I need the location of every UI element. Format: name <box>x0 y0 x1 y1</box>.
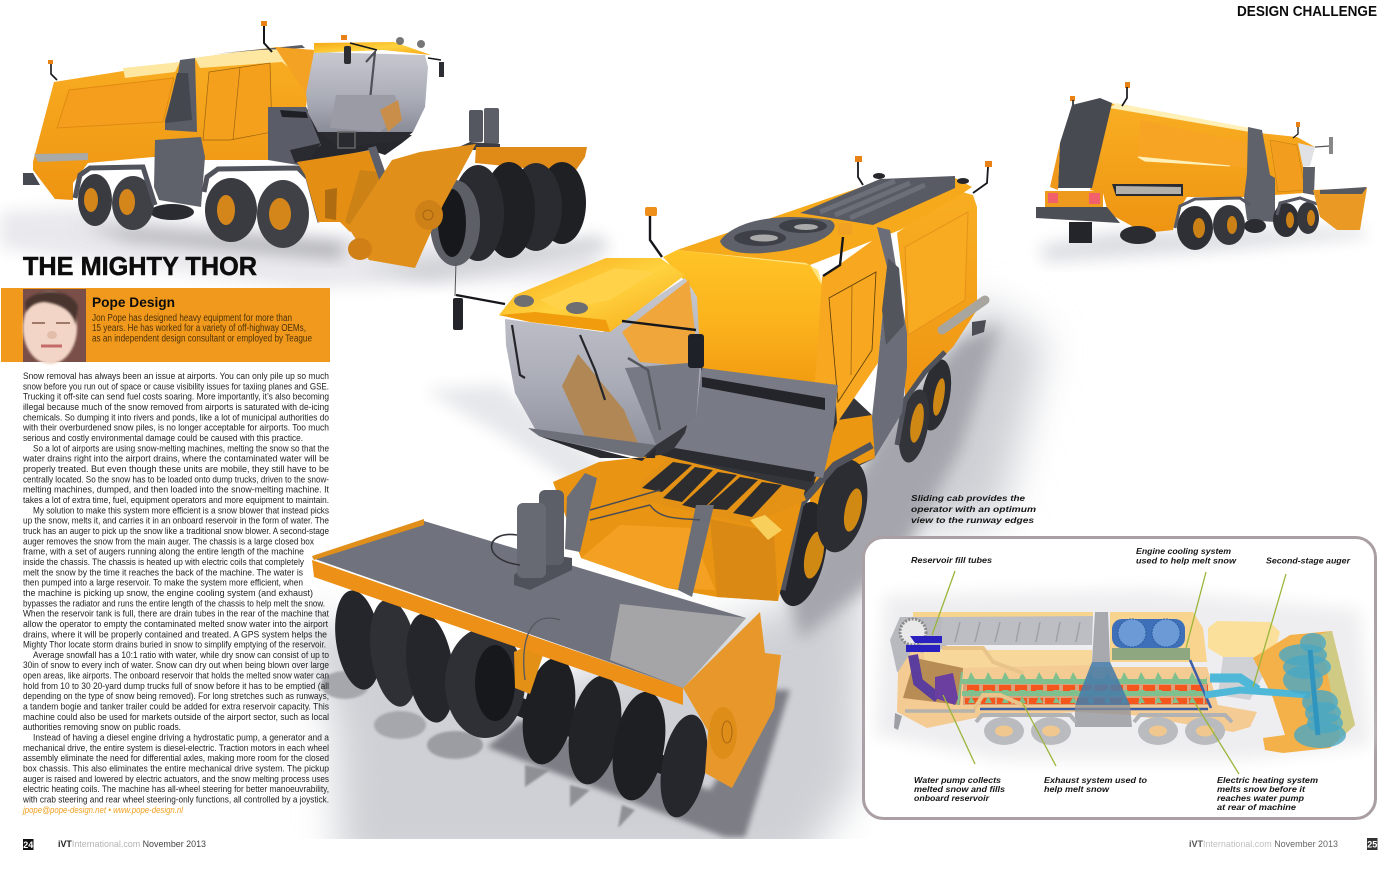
cab roof <box>314 42 431 55</box>
article body text: frame, with a set of augers running along the entire length of the machine <box>23 547 304 558</box>
author bio: as an independent design consultant or employed by Teague <box>92 334 312 344</box>
grey pillar <box>872 227 907 457</box>
panel frame <box>864 538 1376 818</box>
article body text: allow the operator to empty the contaminated melted snow water into the airport <box>23 619 328 630</box>
author banner <box>1 288 330 364</box>
cab roof <box>499 258 685 332</box>
chassis deck <box>553 455 805 601</box>
auger discs <box>329 587 715 821</box>
dark backing under cab <box>268 107 412 165</box>
article body text: then pumped into a large reservoir. To make the system more efficient, when <box>23 578 303 589</box>
author photo <box>23 289 86 364</box>
article body text: centrally located. So the snow has to be loaded onto dump trucks, driven to the snow- <box>23 474 329 485</box>
rear wheel arch <box>897 352 945 445</box>
lower side sill <box>795 415 875 560</box>
blower plate <box>348 144 476 268</box>
cab caption: Sliding cab provides the <box>911 493 1025 503</box>
label: water pump: melted snow and fills <box>914 784 1005 794</box>
author contact links: jpope@pope-design.net • www.pope-design.nl <box>21 805 184 816</box>
label: electric heating: Electric heating system <box>1217 775 1319 785</box>
article body text: Mighty Thor locate storm drains buried in snow to simplify emptying of the reservoir. <box>23 640 326 651</box>
front module and cooling <box>1110 612 1207 662</box>
exhaust <box>1112 184 1183 196</box>
section title: DESIGN CHALLENGE <box>1237 3 1377 20</box>
leader lines <box>932 571 1286 774</box>
label: engine cooling: used to help melt snow <box>1136 556 1237 566</box>
wheels <box>976 715 1232 745</box>
base rail <box>980 708 1208 710</box>
auger discs <box>538 162 586 244</box>
article body text: depending on the type of snow being removed). For long stretches such as runways, <box>23 691 329 702</box>
article body text: When the reservoir tank is full, there are drain tubes in the rear of the machine that <box>23 609 329 620</box>
cab glass <box>306 52 428 132</box>
label: water pump <box>914 775 1005 803</box>
grey pillar and cab <box>1244 127 1275 222</box>
article body text: up the snow, melts it, and carries it in an onboard reservoir in the form of water. The <box>23 516 329 527</box>
article body text: snow before you run out of space or cause visibility issues for taxiing planes and GSE. <box>23 381 329 392</box>
article body text: Trucking it off-site can send fuel costs soaring. More importantly, it’s also becoming <box>23 392 329 403</box>
blower end plate <box>683 612 781 788</box>
water pump and fill tubes <box>906 636 958 705</box>
author bio <box>92 313 312 344</box>
article body text: takes a lot of extra time, fuel, equipment operators and more equipment to maintain. <box>23 495 329 506</box>
article body text: inside the chassis. The chassis is heated up with electric coils that completely <box>23 557 304 568</box>
label: exhaust system <box>1044 775 1147 794</box>
label: engine cooling: Engine cooling system <box>1136 546 1232 556</box>
label: second-stage auger: Second-stage auger <box>1266 556 1351 566</box>
article body text: with crab steering and rear wheel steering-only functions, all controlled by a joystick. <box>22 795 329 806</box>
article body text: hold from 10 to 30 20-yard dump trucks full of snow before it has to be emptied (all <box>23 681 329 692</box>
cab caption: operator with an optimum <box>911 504 1037 514</box>
article body text: melting machines, dumped, and then loaded into the snow-melting machine. It <box>23 485 329 496</box>
truck render: top right rear view <box>1036 82 1367 250</box>
label: electric heating <box>1217 775 1319 812</box>
author name: Pope Design <box>92 294 175 310</box>
article body text: assembly eliminate the need for differential axles, making more room for the closed <box>23 753 329 764</box>
article body text: So a lot of airports are using snow-melting machines, melting the snow so that the <box>33 443 329 454</box>
centre pillar <box>1075 612 1132 727</box>
screw augers <box>962 672 1207 685</box>
exhaust pipes <box>942 648 1023 673</box>
cab glass <box>505 278 701 458</box>
article body text: open areas, like airports. The onboard reservoir that holds the melted snow water can <box>23 671 329 682</box>
blower <box>1313 188 1367 230</box>
label: electric heating: at rear of machine <box>1217 802 1296 812</box>
roof <box>677 178 972 265</box>
lights, mirrors, beacons <box>453 156 992 368</box>
rear grey panel <box>1058 98 1112 188</box>
cab <box>1208 621 1280 657</box>
article body text: Snow removal has always been an issue at airports. You can only pile up so much <box>23 371 329 382</box>
wheels <box>1120 226 1156 244</box>
hull <box>897 650 1257 732</box>
article body text: a tandem bogie and tanker trailer could be added for extra reservoir capacity. This <box>23 702 329 713</box>
article body text: serious and costly environmental damage could be caused with this practice. <box>23 433 303 444</box>
body <box>1090 103 1315 233</box>
second-stage feed <box>1205 690 1310 695</box>
near wheels <box>768 445 875 611</box>
wheels <box>150 204 194 220</box>
left page footer: iVTInternational.com November 2013 <box>58 839 206 850</box>
grey side modules <box>165 58 197 132</box>
beacons, mirrors <box>48 21 444 80</box>
article body text: My solution to make this system more efficient is a snow blower that instead picks <box>33 505 329 516</box>
article body text: melt the snow by the time it reaches the back of the machine. The water is <box>23 567 303 578</box>
exhaust <box>942 300 985 330</box>
article title: THE MIGHTY THOR <box>23 251 257 281</box>
article body text: machine could also be used for markets outside of the airport sector, such as local <box>23 712 329 723</box>
blower shelf <box>312 519 746 705</box>
label: exhaust system: help melt snow <box>1044 784 1110 794</box>
label: exhaust system: Exhaust system used to <box>1044 775 1147 785</box>
body shell <box>33 47 314 200</box>
article body text: Instead of having a diesel engine driving a hydrostatic pump, a generator and a <box>33 733 330 744</box>
truck render: main three-quarter view <box>312 156 992 821</box>
label: electric heating: reaches water pump <box>1217 793 1304 803</box>
blower shelf <box>475 147 587 173</box>
article body text: drains, where it will be properly contained and treated. A GPS system helps the <box>23 629 327 640</box>
cab caption <box>911 493 1037 525</box>
article body text: Average snowfall has a 10:1 ratio with water, while dry snow can consist of up to <box>33 650 329 661</box>
truck render: top left side view <box>23 21 587 268</box>
article body text: authorities removing snow on public roads. <box>23 722 181 733</box>
article body text: bypasses the radiator and runs the entire length of the chassis to help melt the snow. <box>23 598 325 609</box>
grey wall behind cab <box>673 368 838 478</box>
article body text <box>22 371 330 806</box>
blower tubes <box>469 110 483 142</box>
article body text: mechanical drive, the entire system is diesel-electric. Traction motors in each wheel <box>23 743 329 754</box>
rear side panel <box>897 190 977 400</box>
heating element <box>963 683 1208 705</box>
backing between body, wall and deck <box>630 365 875 500</box>
article body text: auger is raised and lowered by electric actuators, and the snow melting process uses <box>23 774 329 785</box>
label: electric heating: melts snow before it <box>1217 784 1306 794</box>
soft ground shadows <box>0 208 1368 869</box>
article body text: truck has an auger to pick up the snow like a traditional snow blower. A second-stage <box>23 526 329 537</box>
main auger <box>1279 633 1346 748</box>
label: water pump: Water pump collects <box>914 775 1001 785</box>
author bio: 15 years. He has worked for a variety of off-highway OEMs, <box>92 323 306 334</box>
author bio: Jon Pope has designed heavy equipment for more than <box>92 313 292 324</box>
article body text: box chassis. This also eliminates the entire mechanical drive system. The pickup <box>23 764 329 775</box>
left page footer: 24 <box>23 840 33 850</box>
article body text: properly treated. But even though these units are mobile, they still have to be <box>23 464 329 475</box>
article body text: the machine is picking up snow, the engine cooling system (and exhaust) <box>23 588 313 599</box>
cutaway truck <box>890 612 1355 753</box>
article body text: water drains right into the airport drains, where the contaminated water will be <box>22 454 329 465</box>
article body text: auger removes the snow from the main auger. The chassis is a large closed box <box>23 536 314 547</box>
cab caption: view to the runway edges <box>911 515 1034 525</box>
label: reservoir fill tubes: Reservoir fill tubes <box>911 555 992 565</box>
article body text: 30in of snow to every inch of water. Snow can dry out when being blown over large <box>23 660 329 671</box>
blower housing <box>1253 631 1355 753</box>
right page footer: 25 <box>1367 840 1377 850</box>
panel: cutaway diagram <box>864 538 1376 818</box>
rear block and roof panel <box>890 617 948 672</box>
front chassis <box>297 150 383 232</box>
side door panel <box>815 233 887 423</box>
motor cylinders <box>491 490 572 590</box>
front face <box>663 250 823 385</box>
diagram shadow <box>875 590 1370 760</box>
cooling pipe <box>1190 660 1211 708</box>
far wheels <box>894 357 956 465</box>
article body text: with their overburdened snow piles, is no longer acceptable for airports. Too much <box>22 423 329 434</box>
label: water pump: onboard reservoir <box>914 793 990 803</box>
beacons <box>1070 82 1333 154</box>
article body text: electric heating coils. The machine has all-wheel steering for better manoeuvrability, <box>23 784 329 795</box>
right page footer: iVTInternational.com November 2013 <box>1189 839 1338 850</box>
article body text: chemicals. So dumping it into rivers and ponds, like a lot of municipal authorities do <box>23 412 329 423</box>
label: engine cooling <box>1136 546 1237 566</box>
article body text: illegal because much of the snow removed from airports is saturated with de-icing <box>23 402 329 413</box>
